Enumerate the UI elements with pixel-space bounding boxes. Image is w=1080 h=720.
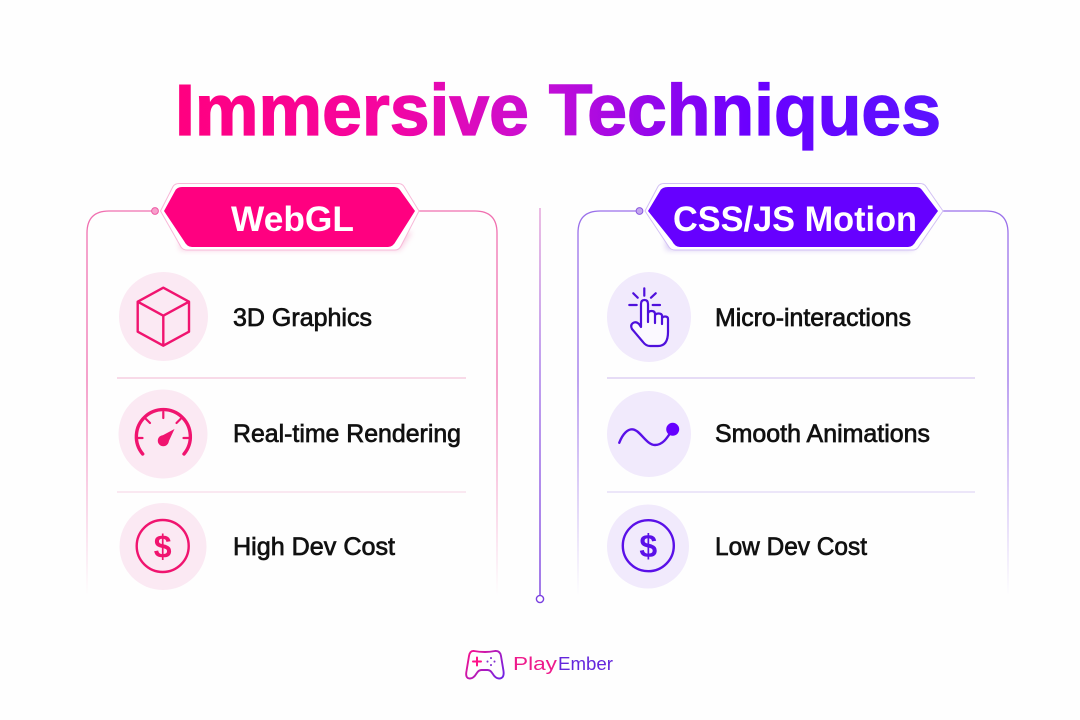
title: Immersive Techniques xyxy=(175,71,941,151)
row: Low Dev Cost xyxy=(607,504,867,588)
panel: CSS/JS Motion xyxy=(578,184,1008,596)
row: High Dev Cost: High Dev Cost xyxy=(233,533,395,561)
badge: CSS/JS Motion xyxy=(645,184,943,250)
badge: WebGL: WebGL xyxy=(231,200,354,239)
logo: PlayEmber: Play xyxy=(513,653,558,674)
badge: WebGL xyxy=(160,184,419,250)
icon: dollar xyxy=(623,520,674,571)
icon: dollar: $ xyxy=(639,528,657,564)
icon: gauge xyxy=(136,410,190,454)
row: Micro-interactions xyxy=(607,272,911,362)
panel outline xyxy=(87,211,497,596)
row: High Dev Cost xyxy=(120,503,395,590)
icon: gamepad xyxy=(466,651,504,678)
badge: CSS/JS Motion: CSS/JS Motion xyxy=(673,200,917,239)
row: 3D Graphics: 3D Graphics xyxy=(233,304,372,332)
row: Real-time Rendering xyxy=(118,390,461,478)
connector dot xyxy=(152,208,158,214)
row: 3D Graphics xyxy=(119,272,372,361)
icon: tapping hand xyxy=(629,288,668,346)
icon: motion curve xyxy=(619,423,679,445)
logo: PlayEmber xyxy=(466,651,613,678)
row: Micro-interactions: Micro-interactions xyxy=(715,304,911,332)
icon: dollar xyxy=(137,520,189,572)
center divider xyxy=(536,208,544,603)
row: Smooth Animations: Smooth Animations xyxy=(715,420,930,448)
panel outline xyxy=(578,211,1008,596)
logo: PlayEmber: Ember xyxy=(558,653,613,674)
icon: dollar: $ xyxy=(154,528,172,564)
row: Real-time Rendering: Real-time Rendering xyxy=(233,420,461,448)
row: Smooth Animations xyxy=(607,391,930,477)
icon: cube xyxy=(138,288,189,346)
row: Low Dev Cost: Low Dev Cost xyxy=(715,533,867,561)
panel: WebGL xyxy=(87,184,497,596)
connector dot xyxy=(636,208,643,214)
